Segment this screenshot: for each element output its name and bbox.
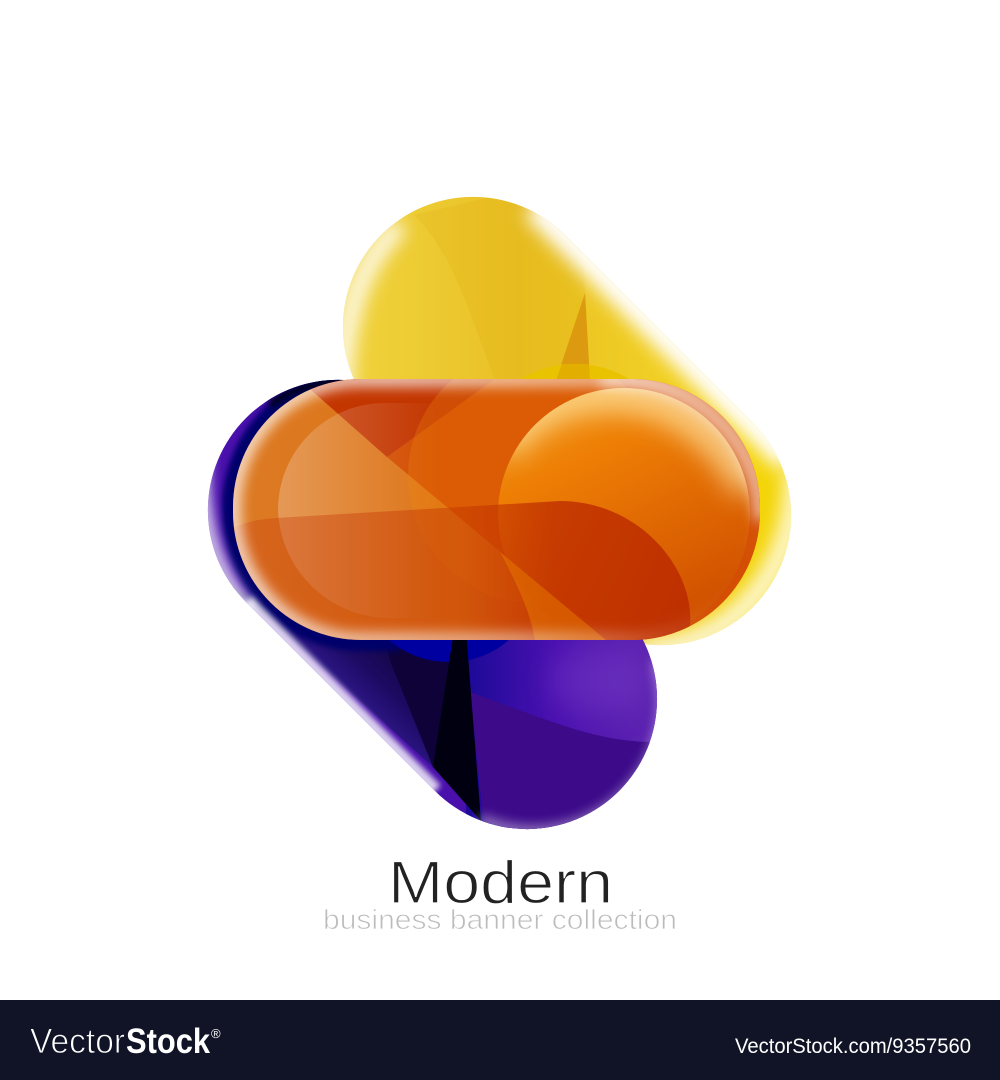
glow: pill top right corner (600, 379, 762, 520)
facet: darker inner wedge (388, 650, 449, 767)
facet: blue circle (390, 640, 508, 662)
facet: upper right orange-red (387, 379, 760, 640)
glow: pill top (330, 364, 450, 388)
logo: orange glossy pill (233, 379, 760, 640)
logo: purple capsule (200, 375, 666, 840)
facet: arc behind pill (521, 365, 629, 379)
title: Modern (388, 849, 613, 916)
edge glow: left arc (203, 440, 250, 610)
edge glow: diagonal lower edge (246, 602, 435, 791)
facet: right lobe violet (466, 640, 658, 830)
halo: navy shadow around pill left side (233, 379, 400, 640)
facet: red triangle upper (310, 379, 494, 457)
facet: big bright circle (498, 388, 750, 598)
edge glow: left arc (342, 225, 400, 440)
footer logo: registered mark: ® (211, 1026, 221, 1041)
edge glow: straight upper edge (535, 205, 790, 460)
footer logo: Vector: Vector (30, 1022, 125, 1061)
footer bar (0, 1000, 1000, 1080)
facet: lower right dark violet (470, 692, 660, 835)
facet: dark diagonal body (232, 586, 433, 767)
facet: darker yellow band (414, 198, 553, 270)
logo: yellow capsule (330, 190, 800, 650)
facet: wedge lower overlap (556, 364, 590, 380)
facet: lower red band (233, 501, 690, 645)
glow: pill bottom (290, 628, 610, 654)
glow: pill top right (450, 365, 680, 385)
facet: middle circle (408, 379, 626, 528)
footer logo: Stock: Stock (126, 1022, 210, 1061)
footer image id: VectorStock.com/9357560 (735, 1035, 971, 1058)
edge glow: lower right arc (640, 470, 795, 650)
facet: left soft rounded panel (278, 403, 418, 618)
facet: diagonal light wedge (500, 552, 606, 640)
edge glow: right lobe rim (480, 660, 664, 832)
glow: top of big circle (505, 395, 750, 490)
subtitle: business banner collection (323, 904, 677, 935)
facet: black wedge (433, 630, 481, 821)
facet: upper right violet highlight (552, 648, 638, 712)
glow: pill outline (233, 379, 760, 640)
halo: black top corner (270, 380, 345, 405)
facet: amber wedge (561, 294, 589, 365)
